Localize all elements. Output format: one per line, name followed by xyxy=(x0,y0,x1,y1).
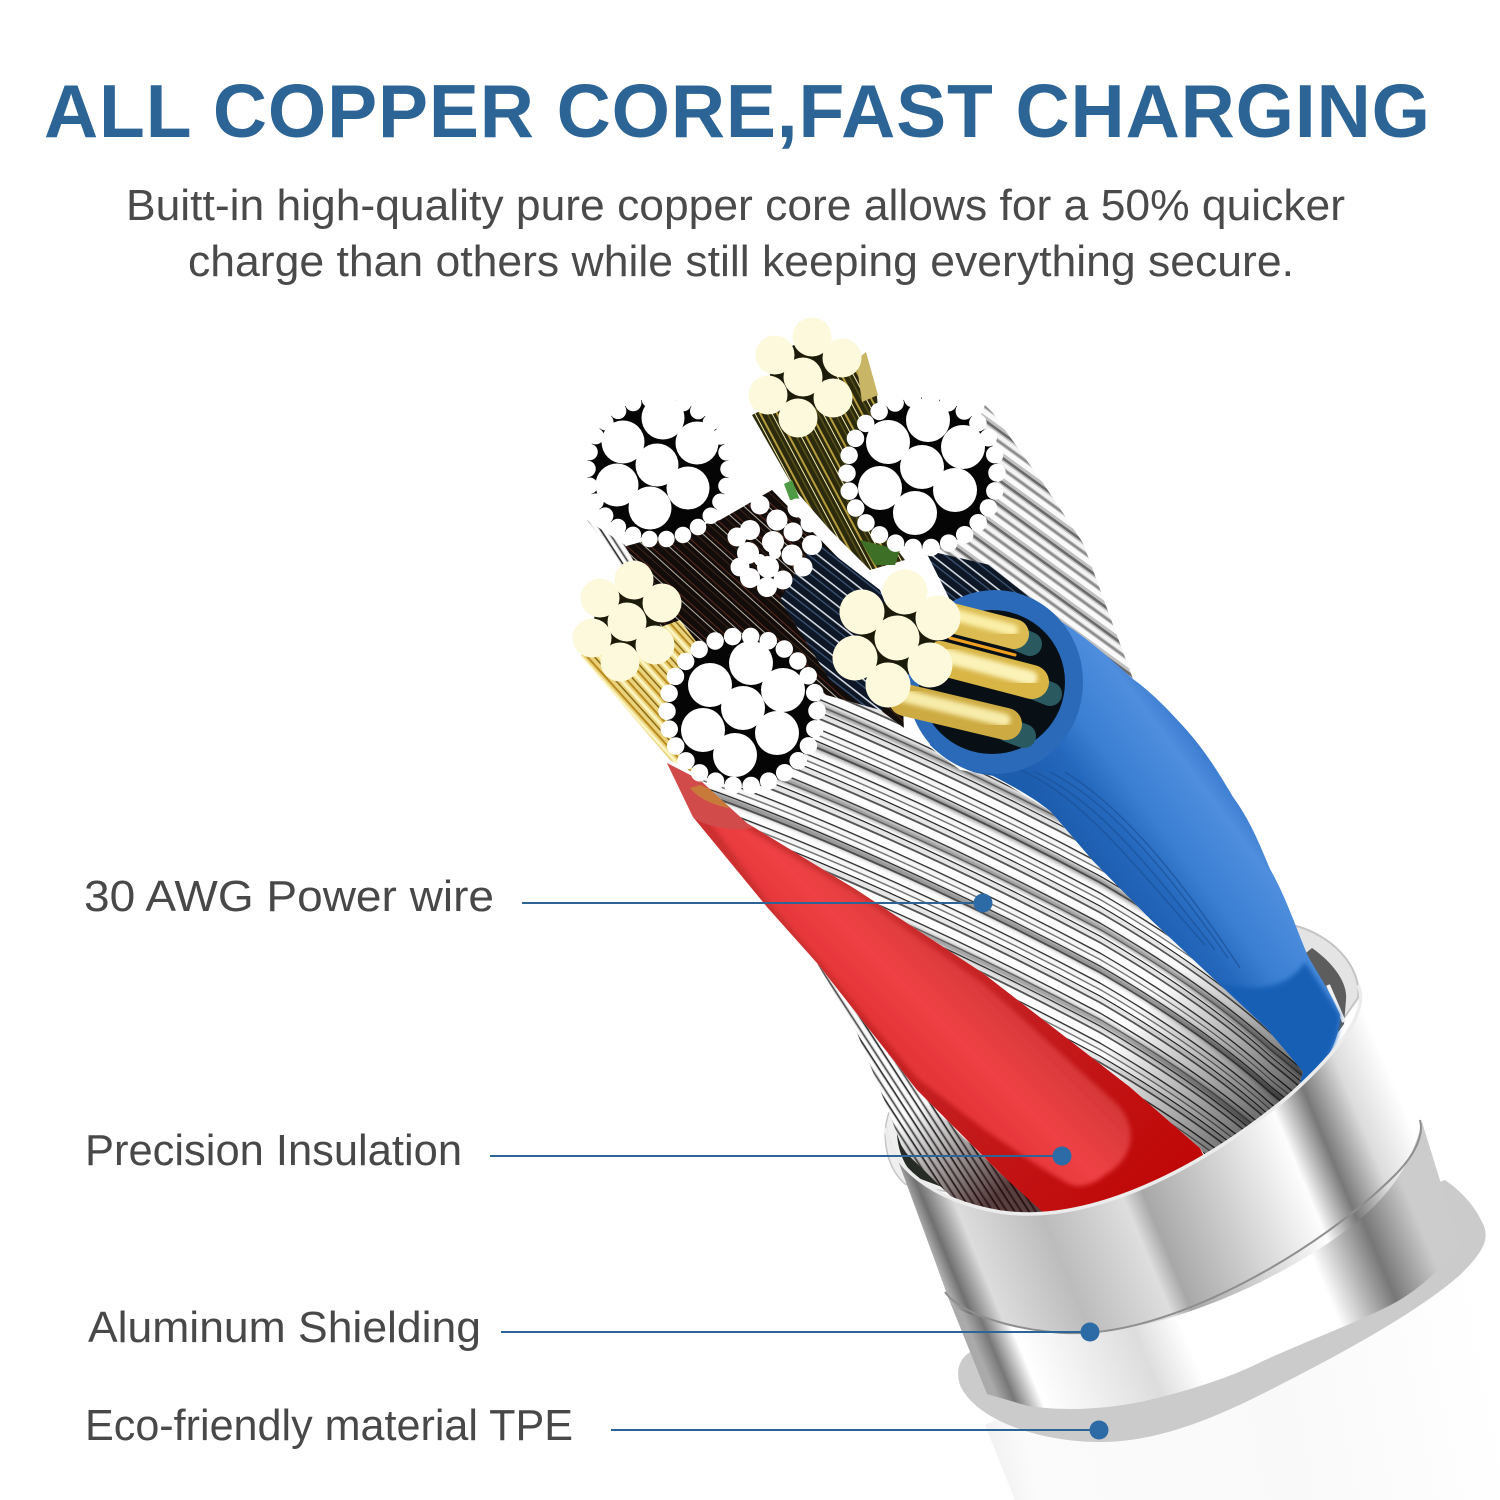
white TPE jacket xyxy=(985,1215,1500,1500)
thin silver strands beside bundle A xyxy=(587,520,660,610)
centre small strand bundle xyxy=(728,496,822,597)
aluminum collar lower xyxy=(939,1122,1460,1409)
subtitle text xyxy=(126,181,1345,286)
silver wire, rear left xyxy=(817,963,1060,1225)
callout: aluminum shielding: Aluminum Shielding xyxy=(88,1303,481,1352)
bundle B strands xyxy=(846,398,998,548)
green insulation glimpses xyxy=(784,480,900,565)
callout: 30 AWG power wire: 30 AWG Power wire xyxy=(84,872,494,921)
callout: precision insulation xyxy=(85,1126,1072,1175)
silver power wire bundle xyxy=(701,684,1303,1154)
cable illustration xyxy=(572,318,1500,1500)
rear collar rim xyxy=(885,926,1358,1194)
bundle C strands xyxy=(666,636,818,786)
gold wire lower left xyxy=(580,620,725,790)
gold highlight on top wire xyxy=(856,352,878,402)
title: ALL COPPER CORE,FAST CHARGING xyxy=(44,69,1430,153)
gold bundle top xyxy=(748,318,862,438)
red insulated wire xyxy=(667,763,1215,1228)
collar seam highlight xyxy=(945,1120,1421,1333)
gold bundle right xyxy=(832,570,960,708)
callout: 30 AWG power wire xyxy=(84,872,992,921)
collar rim edge xyxy=(886,985,1361,1214)
wire end rim xyxy=(907,590,1083,774)
TPE grey flange xyxy=(958,1180,1486,1442)
subtitle text: charge than others while still keeping everything secure. xyxy=(188,237,1294,286)
callout: eco-friendly TPE: Eco-friendly material TPE xyxy=(85,1401,573,1450)
callout: eco-friendly TPE xyxy=(85,1401,1108,1450)
olive gold wire behind xyxy=(752,360,905,570)
aluminum collar upper xyxy=(886,985,1422,1332)
blue insulated wire xyxy=(925,606,1340,1105)
subtitle text: Buitt-in high-quality pure copper core allows for a 50% quicker xyxy=(126,181,1345,230)
dark strands above blue wire xyxy=(925,550,1045,625)
gold bundle left xyxy=(572,560,682,682)
callout: precision insulation: Precision Insulation xyxy=(85,1126,462,1175)
dark core interior xyxy=(612,490,905,760)
callout: aluminum shielding xyxy=(88,1303,1100,1352)
wire end opening xyxy=(919,610,1065,754)
gold conductors inside blue wire xyxy=(905,611,1050,736)
bundle A strands xyxy=(587,396,729,540)
navy interior strands xyxy=(780,540,900,720)
silver wire, rear right xyxy=(925,405,1133,679)
